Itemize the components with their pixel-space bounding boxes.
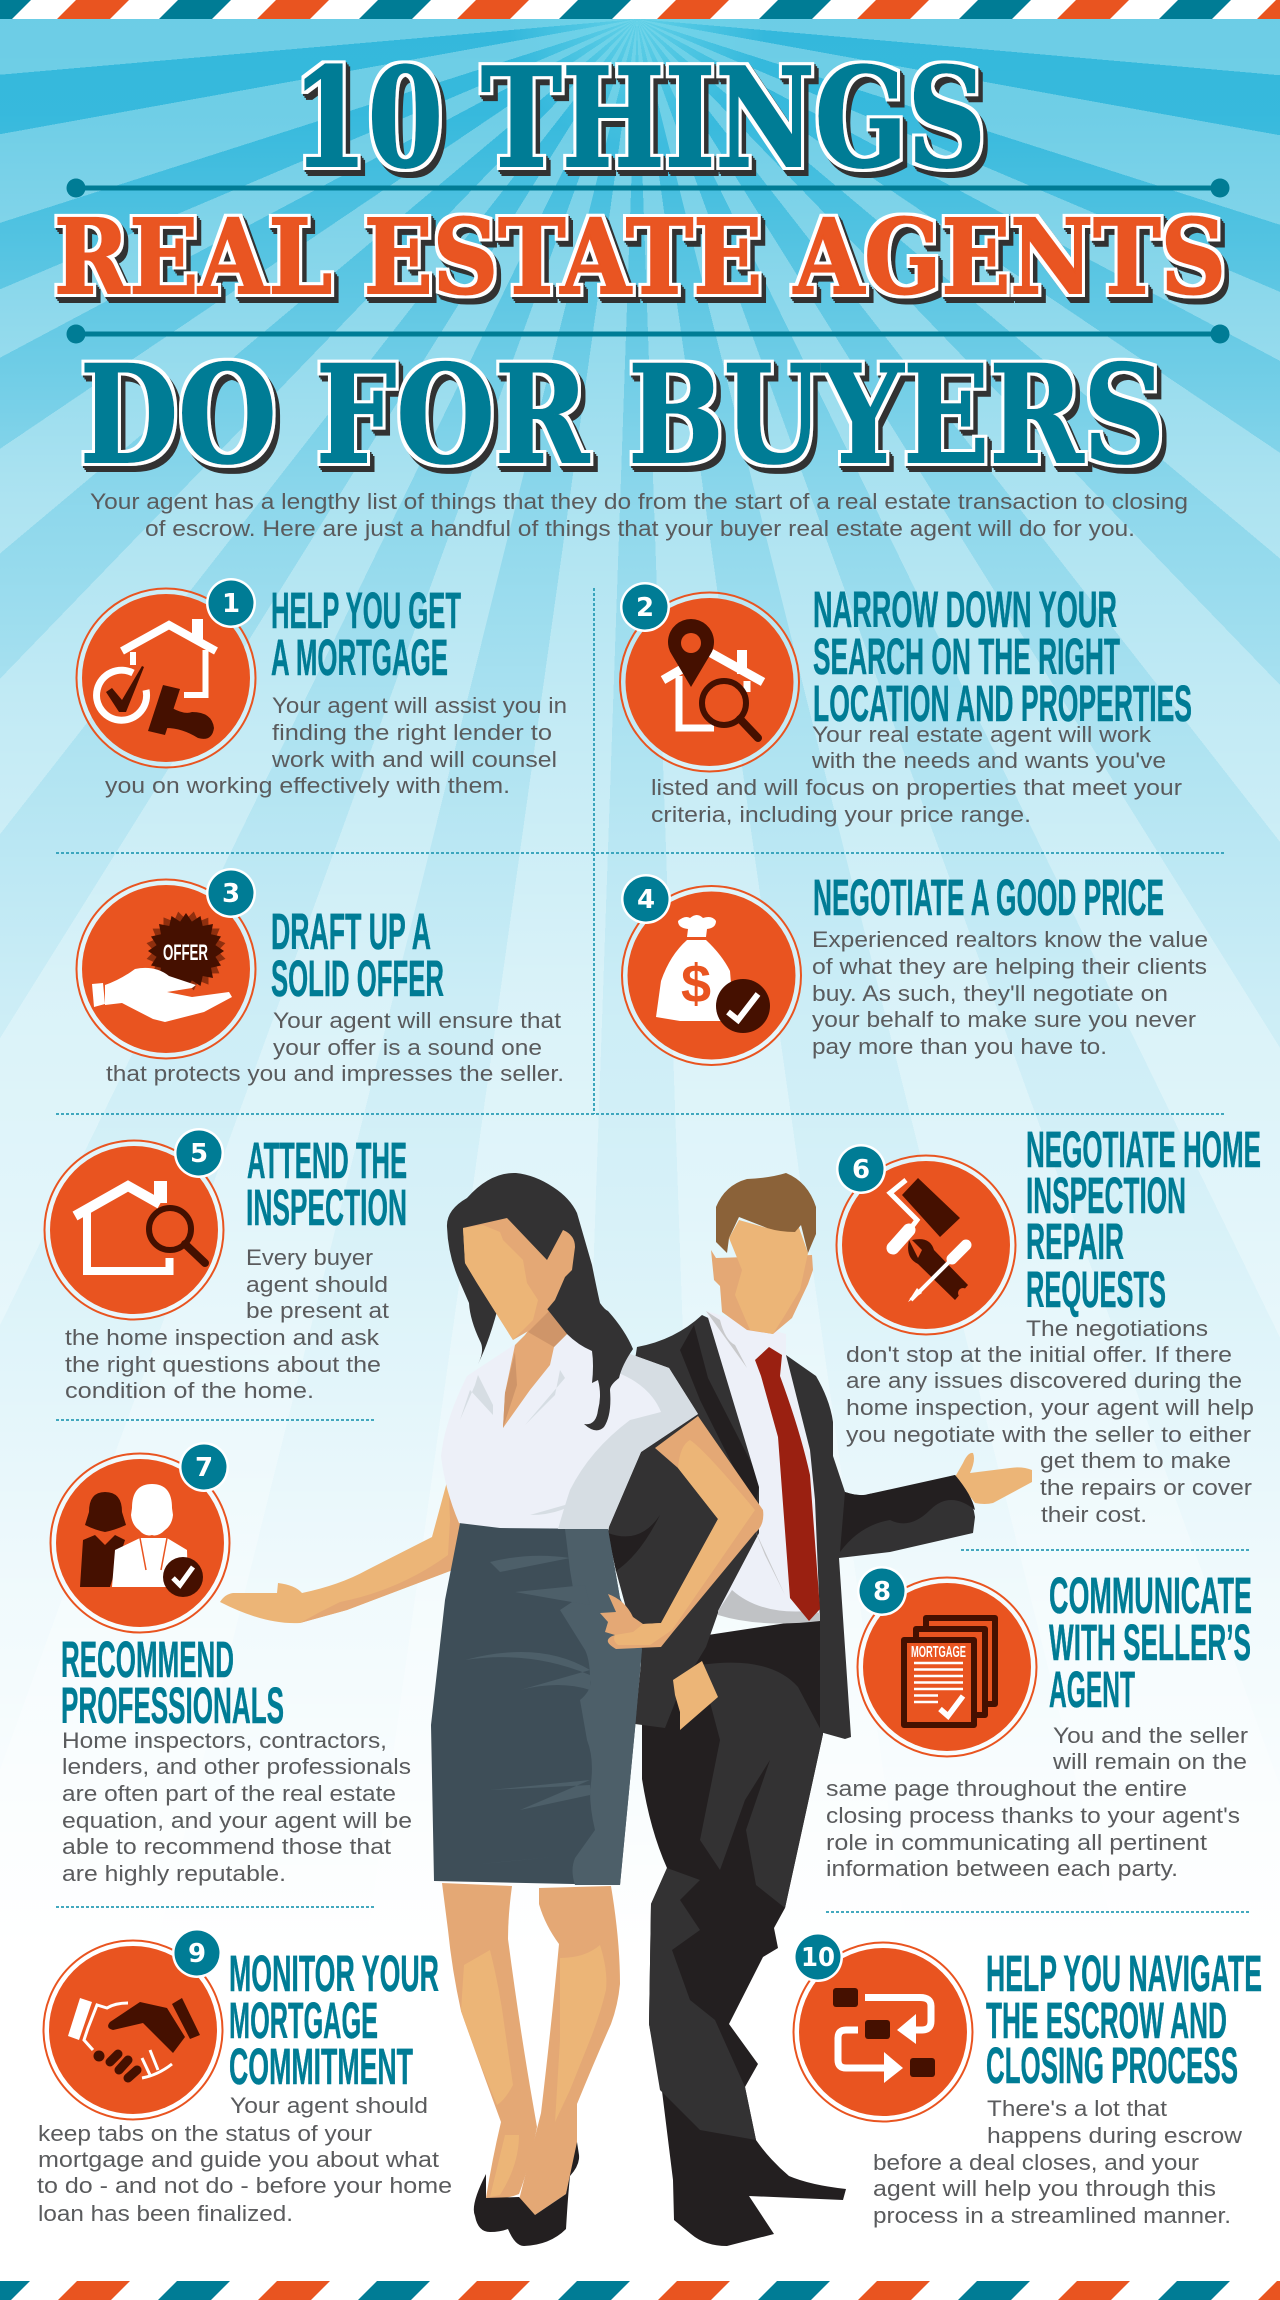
body 1: finding the right lender to (272, 720, 552, 745)
heading 5 (246, 1132, 407, 1236)
body 10: process in a streamlined manner. (873, 2203, 1231, 2228)
badge 10: 10 (801, 1943, 835, 1973)
heading 8 (1049, 1567, 1252, 1718)
badge 10 (793, 1932, 843, 1982)
body 3: Your agent will ensure that (273, 1008, 561, 1033)
badge 9 (172, 1928, 222, 1978)
body 8: same page throughout the entire (826, 1776, 1187, 1801)
icon: map pin, house and magnifier (620, 592, 799, 772)
badge 3 (206, 868, 256, 918)
body 2: criteria, including your price range. (651, 802, 1031, 827)
body 4 (812, 927, 1208, 1059)
panel: item 2 narrow down your search (620, 581, 1192, 827)
body 6: get them to make (1040, 1448, 1231, 1473)
body 7 (62, 1728, 412, 1886)
body 10 (873, 2096, 1242, 2228)
body 6: are any issues discovered during the (846, 1368, 1242, 1393)
woman right arm and hand (600, 1416, 763, 1649)
man pants and shoes (642, 1618, 846, 2246)
body 8: You and the seller (1053, 1723, 1248, 1748)
icon: money bag: $ (681, 954, 711, 1014)
woman skirt (431, 1523, 642, 1885)
body 9 (37, 2093, 452, 2226)
panel: item 4 negotiate a good price (621, 869, 1208, 1065)
badge 6: 6 (852, 1155, 870, 1185)
badge 5 (174, 1128, 224, 1178)
badge 2 (620, 582, 670, 632)
woman face (463, 1218, 575, 1340)
illustration: man (608, 1173, 1032, 2246)
panel: item 7 recommend professionals (50, 1442, 412, 1886)
heading 1: HELP YOU GET (271, 582, 461, 639)
body 7: are highly reputable. (62, 1861, 286, 1886)
icon: professionals (50, 1454, 230, 1632)
badge 7: 7 (195, 1453, 213, 1483)
badge 1 (206, 578, 256, 628)
intro text (90, 489, 1188, 541)
heading 1: A MORTGAGE (271, 629, 448, 686)
body 4: of what they are helping their clients (812, 954, 1207, 979)
body 2: listed and will focus on properties that meet your (651, 775, 1182, 800)
body 1: Your agent will assist you in (272, 693, 567, 718)
heading 9: MORTGAGE (229, 1992, 378, 2049)
badge 1: 1 (222, 589, 240, 619)
body 7: able to recommend those that (62, 1834, 391, 1859)
heading 7: RECOMMEND (61, 1631, 234, 1688)
body 3: that protects you and impresses the seller. (106, 1061, 564, 1086)
woman blouse (441, 1334, 698, 1529)
badge 3: 3 (222, 879, 240, 909)
body 5 (65, 1245, 389, 1403)
man left hand (955, 1453, 1032, 1504)
badge 8: 8 (873, 1577, 891, 1607)
body 5: condition of the home. (65, 1378, 314, 1403)
body 8: information between each party. (826, 1856, 1178, 1881)
heading 6: REPAIR (1026, 1213, 1124, 1270)
body 4: Experienced realtors know the value (812, 927, 1208, 952)
body 1 (105, 693, 567, 798)
body 6: home inspection, your agent will help (846, 1395, 1254, 1420)
man shirt (706, 1311, 820, 1623)
icon: process flow (794, 1942, 972, 2122)
icon: house and magnifier (44, 1140, 224, 1320)
body 8: closing process thanks to your agent's (826, 1803, 1240, 1828)
body 3 (106, 1008, 564, 1086)
panel: item 3 draft up a solid offer (76, 868, 564, 1086)
icon: money bag (622, 886, 801, 1065)
badge 4: 4 (637, 885, 655, 915)
woman shoes (474, 2142, 579, 2246)
bottom airmail stripe (0, 2281, 1280, 2300)
icon: roller and tools (836, 1156, 1016, 1334)
heading 6 (1026, 1121, 1261, 1318)
body 6: the repairs or cover (1040, 1475, 1252, 1500)
panel: item 10 help you navigate escrow (793, 1932, 1262, 2228)
body 4: buy. As such, they'll negotiate on (812, 981, 1168, 1006)
body 5: agent should (246, 1272, 388, 1297)
panel: item 8 communicate with seller's agent (826, 1566, 1252, 1881)
body 6: don't stop at the initial offer. If there (846, 1342, 1232, 1367)
body 2: with the needs and wants you've (811, 748, 1166, 773)
illustration: woman (220, 1173, 763, 2246)
body 1: you on working effectively with them. (105, 773, 510, 798)
heading 8: AGENT (1049, 1661, 1135, 1718)
body 7: equation, and your agent will be (62, 1808, 412, 1833)
badge 2: 2 (636, 593, 654, 623)
panel: item 6 negotiate home inspection repair requests (836, 1121, 1261, 1527)
body 4: your behalf to make sure you never (812, 1007, 1196, 1032)
body 10: before a deal closes, and your (873, 2150, 1199, 2175)
man tie (755, 1347, 820, 1621)
heading 2 (813, 581, 1192, 732)
body 7: Home inspectors, contractors, (62, 1728, 387, 1753)
heading 3: SOLID OFFER (271, 950, 444, 1007)
body 2: Your real estate agent will work (812, 722, 1152, 747)
body 1: work with and will counsel (271, 747, 557, 772)
body 6: their cost. (1041, 1502, 1147, 1527)
body 9: to do - and not do - before your home (37, 2173, 452, 2198)
heading 10 (986, 1945, 1262, 2094)
icon: mortgage documents: MORTGAGE (911, 1644, 966, 1661)
body 6: you negotiate with the seller to either (846, 1422, 1251, 1447)
title (54, 38, 1230, 494)
badge 8 (857, 1566, 907, 1616)
heading 9: MONITOR YOUR (229, 1945, 439, 2002)
body 4: pay more than you have to. (812, 1034, 1107, 1059)
divider top (66, 178, 1230, 198)
woman chest and neck (503, 1277, 568, 1428)
man hanging hand (673, 1661, 718, 1730)
heading 7: PROFESSIONALS (61, 1677, 284, 1734)
title line: 10 things: 10 THINGS (292, 38, 986, 199)
badge 5: 5 (190, 1139, 208, 1169)
heading 9: COMMITMENT (229, 2038, 413, 2095)
body 8 (826, 1723, 1248, 1881)
icon: mortgage documents (858, 1578, 1036, 1756)
body 5: the home inspection and ask (65, 1325, 380, 1350)
body 7: are often part of the real estate (62, 1781, 396, 1806)
badge 6 (836, 1144, 886, 1194)
body 7: lenders, and other professionals (62, 1754, 411, 1779)
badge 7 (179, 1442, 229, 1492)
body 10: happens during escrow (987, 2123, 1242, 2148)
icon: offer in hand (76, 880, 256, 1058)
body 5: Every buyer (246, 1245, 373, 1270)
heading 9 (229, 1945, 439, 2095)
heading 5: ATTEND THE (247, 1132, 407, 1189)
body 8: will remain on the (1052, 1749, 1247, 1774)
heading 5: INSPECTION (246, 1179, 407, 1236)
woman legs (442, 1883, 620, 2215)
heading 3 (271, 903, 444, 1007)
body 8: role in communicating all pertinent (826, 1830, 1207, 1855)
body 6: The negotiations (1026, 1316, 1208, 1341)
panel: item 9 monitor your mortgage commitment (37, 1928, 452, 2226)
woman left arm (220, 1478, 460, 1623)
heading 1 (271, 582, 461, 686)
divider bottom (66, 324, 1230, 344)
man head (711, 1173, 816, 1334)
badge 4 (621, 874, 671, 924)
body 9: Your agent should (230, 2093, 428, 2118)
body 3: your offer is a sound one (273, 1035, 542, 1060)
body 9: loan has been finalized. (38, 2201, 293, 2226)
icon: house and stamp (76, 588, 256, 768)
body 5: be present at (246, 1298, 389, 1323)
body 10: agent will help you through this (873, 2176, 1216, 2201)
top airmail stripe (0, 0, 1280, 19)
body 9: keep tabs on the status of your (38, 2121, 372, 2146)
intro text: of escrow. Here are just a handful of things that your buyer real estate agent will do for you. (145, 516, 1135, 541)
body 6 (846, 1316, 1254, 1527)
panel: item 1 help you get a mortgage (76, 578, 567, 798)
body 9: mortgage and guide you about what (38, 2147, 439, 2172)
man jacket (608, 1315, 975, 1739)
panel: item 5 attend the inspection (44, 1128, 407, 1403)
woman hair (447, 1173, 633, 1430)
dividers between items (56, 588, 1251, 1912)
heading 3: DRAFT UP A (271, 903, 431, 960)
body 5: the right questions about the (65, 1352, 381, 1377)
body 2 (651, 722, 1182, 827)
icon: offer in hand: OFFER (163, 940, 208, 965)
body 10: There's a lot that (987, 2096, 1167, 2121)
badge 9: 9 (188, 1939, 206, 1969)
intro text: Your agent has a lengthy list of things that they do from the start of a real estate transaction to closing (90, 489, 1188, 514)
icon: handshake (44, 1940, 222, 2120)
heading 7 (61, 1631, 284, 1734)
